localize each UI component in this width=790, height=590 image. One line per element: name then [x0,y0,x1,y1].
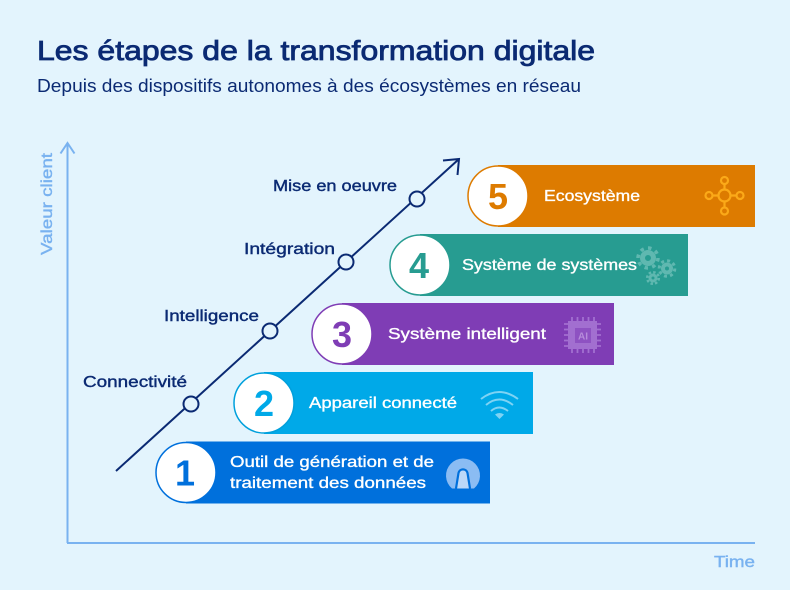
bar [498,165,755,227]
number: 5 [488,176,508,217]
milestone: connectivité [184,396,198,412]
x axis line [67,542,755,544]
number: 4 [409,245,429,286]
subtitle: Depuis des dispositifs autonomes à des écosystèmes en réseau [37,76,581,96]
label: intelligence: Intelligence [164,308,259,325]
y axis arrow [60,143,74,543]
title: Les étapes de la transformation digitale [37,35,595,66]
step 4 [390,234,688,296]
icon: tunnel [446,459,480,488]
label: Système de systèmes [462,257,637,274]
bar [420,234,688,296]
milestone: mise en oeuvre [410,192,424,206]
label: traitement des données [230,475,426,492]
bar [186,442,490,504]
number badge [156,442,216,502]
milestone: intégration [338,254,354,270]
step 5 [468,165,755,227]
bar [264,372,533,434]
label: intégration: Intégration [244,241,335,258]
icon: AI chip [564,317,601,353]
bar [342,303,614,365]
number badge [312,304,372,364]
growth arrow with milestones [116,159,459,471]
icon: wifi [481,392,518,419]
step 1 [156,442,490,504]
number: 3 [332,314,352,355]
y axis label: Valeur client [39,152,56,255]
number badge [390,235,450,295]
step 3 [312,303,614,365]
icon: network nodes [706,177,744,214]
number: 1 [175,452,195,494]
x axis label: Time [714,554,755,571]
label: mise en oeuvre: Mise en oeuvre [273,178,397,195]
axes [60,143,755,543]
label: connectivité: Connectivité [83,374,187,391]
number: 2 [254,383,274,424]
diagonal arrow [116,159,459,471]
number badge [234,373,294,433]
label: Outil de génération et de [230,454,434,471]
milestone labels [83,178,397,391]
icon: AI chip: AI [578,332,588,342]
milestone: intelligence [262,324,278,338]
label: Ecosystème [544,188,640,205]
number badge [468,166,528,226]
label: Appareil connecté [309,395,457,412]
icon: gears [638,248,675,284]
label: Système intelligent [388,326,547,343]
step 2 [234,372,533,434]
